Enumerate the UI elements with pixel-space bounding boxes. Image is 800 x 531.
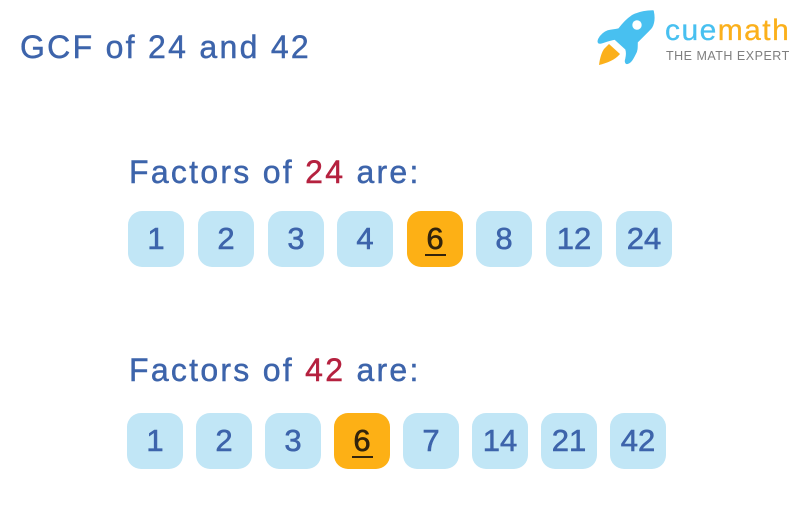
factor 42: 42: [621, 423, 655, 458]
factor 3: 3: [287, 221, 305, 256]
factor 24: [616, 211, 672, 267]
logo wordmark: cuemath: [665, 14, 790, 47]
heading: factors of 24: Factors of 24 are:: [129, 154, 421, 190]
factor 3: 3: [284, 423, 302, 458]
icon: rocket: [598, 10, 655, 65]
factor 21: [541, 413, 597, 469]
factor 1: 1: [146, 423, 164, 458]
factor 7: [403, 413, 459, 469]
factor 42: [610, 413, 666, 469]
factor 4: 4: [356, 221, 374, 256]
logo tagline: THE MATH EXPERT: [666, 49, 790, 63]
factor 1: [127, 413, 183, 469]
factor 7: 7: [422, 423, 440, 458]
factor 12: 12: [557, 221, 591, 256]
factor 6 highlighted: 6: [353, 423, 371, 458]
factor 1: [128, 211, 184, 267]
row: factors of 42: [127, 413, 666, 469]
factor 2: 2: [217, 221, 235, 256]
factor 3: [265, 413, 321, 469]
factor 21: 21: [552, 423, 586, 458]
factor 8: 8: [495, 221, 513, 256]
factor 8: [476, 211, 532, 267]
factor 12: [546, 211, 602, 267]
factor 2: [196, 413, 252, 469]
logo: cuemath: [598, 10, 790, 65]
row: factors of 24: [128, 211, 672, 267]
factor 1: 1: [147, 221, 165, 256]
factor 3: [268, 211, 324, 267]
factor 6 highlighted: 6: [426, 221, 444, 256]
heading: factors of 42: Factors of 42 are:: [129, 352, 421, 388]
factor 6 highlighted: [334, 413, 390, 469]
factor 14: [472, 413, 528, 469]
factor 2: 2: [215, 423, 233, 458]
factor 4: [337, 211, 393, 267]
factor 2: [198, 211, 254, 267]
factor 6 highlighted: [407, 211, 463, 267]
factor 14: 14: [483, 423, 517, 458]
title: GCF of 24 and 42: [20, 29, 311, 65]
factor 24: 24: [627, 221, 661, 256]
